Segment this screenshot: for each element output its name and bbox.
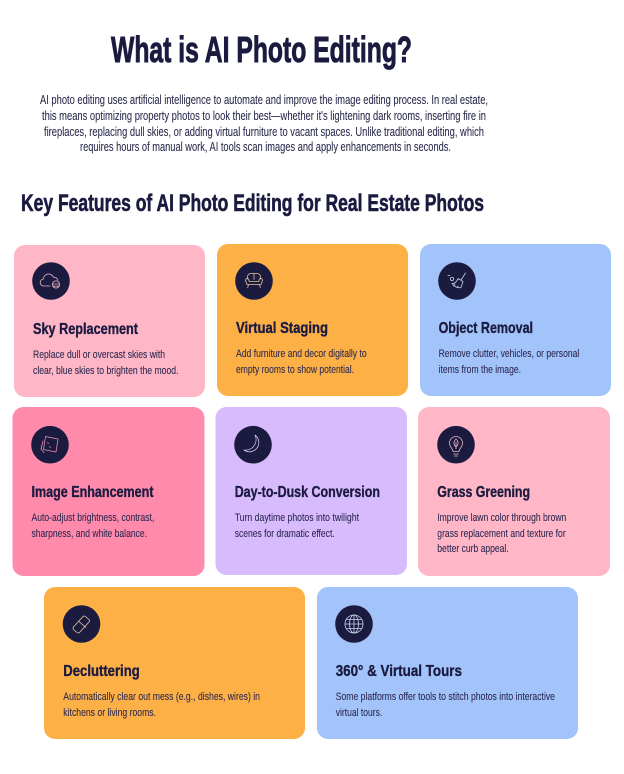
heading: Image Enhancement <box>32 484 154 501</box>
description <box>236 348 367 376</box>
description: items from the image. <box>439 364 521 376</box>
panel: day-to-dusk conversion <box>216 407 407 575</box>
panel: decluttering <box>44 587 305 739</box>
icon: sofa <box>235 262 273 300</box>
panel: virtual staging <box>217 244 408 396</box>
panel: grass greening <box>418 407 610 576</box>
icon: leaf light bulb <box>437 426 475 464</box>
description <box>33 349 178 377</box>
description: Auto-adjust brightness, contrast, <box>32 512 154 524</box>
description: Turn daytime photos into twilight <box>235 512 359 524</box>
icon: crescent moon <box>234 426 272 464</box>
panel: object removal <box>420 244 611 396</box>
heading: Object Removal <box>439 320 533 337</box>
description: kitchens or living rooms. <box>63 707 156 719</box>
heading: Day-to-Dusk Conversion <box>235 484 380 501</box>
description: empty rooms to show potential. <box>236 364 354 376</box>
description: Improve lawn color through brown <box>437 512 566 524</box>
heading: Sky Replacement <box>33 321 138 338</box>
description <box>437 512 566 555</box>
description: Add furniture and decor digitally to <box>236 348 367 360</box>
icon: globe <box>335 605 373 643</box>
panel: sky replacement <box>14 245 205 397</box>
description: Replace dull or overcast skies with <box>33 349 165 361</box>
description <box>336 691 555 719</box>
icon: eraser <box>63 605 100 643</box>
intro paragraph: this means optimizing property photos to look their best—whether it's lightening dark rooms, inserting fire in <box>42 109 486 123</box>
description: Some platforms offer tools to stitch photos into interactive <box>336 691 555 703</box>
intro paragraph: requires hours of manual work, AI tools scan images and apply enhancements in seconds. <box>80 140 451 154</box>
description <box>63 691 260 719</box>
heading: Decluttering <box>63 663 140 680</box>
heading: Virtual Staging <box>236 320 328 337</box>
icon: photo stack <box>31 426 69 464</box>
description <box>439 348 579 376</box>
intro paragraph <box>40 93 488 154</box>
heading: Grass Greening <box>437 484 530 501</box>
description <box>235 512 359 540</box>
intro paragraph: fireplaces, replacing dull skies, or adding virtual furniture to vacant spaces. Unlike traditional editing, which <box>44 125 484 139</box>
description: virtual tours. <box>336 707 382 719</box>
title: What is AI Photo Editing? <box>111 29 412 70</box>
panel: 360 and virtual tours <box>317 587 578 739</box>
panel: image enhancement <box>12 407 204 576</box>
description: Automatically clear out mess (e.g., dishes, wires) in <box>63 691 260 703</box>
description <box>32 512 154 540</box>
icon: cloud <box>32 262 70 300</box>
description: grass replacement and texture for <box>437 528 566 540</box>
description: clear, blue skies to brighten the mood. <box>33 365 178 377</box>
heading: 360° & Virtual Tours <box>336 663 462 680</box>
description: scenes for dramatic effect. <box>235 528 335 540</box>
description: Remove clutter, vehicles, or personal <box>439 348 579 360</box>
description: sharpness, and white balance. <box>32 528 147 540</box>
icon: broom <box>438 262 476 300</box>
description: better curb appeal. <box>437 543 509 555</box>
